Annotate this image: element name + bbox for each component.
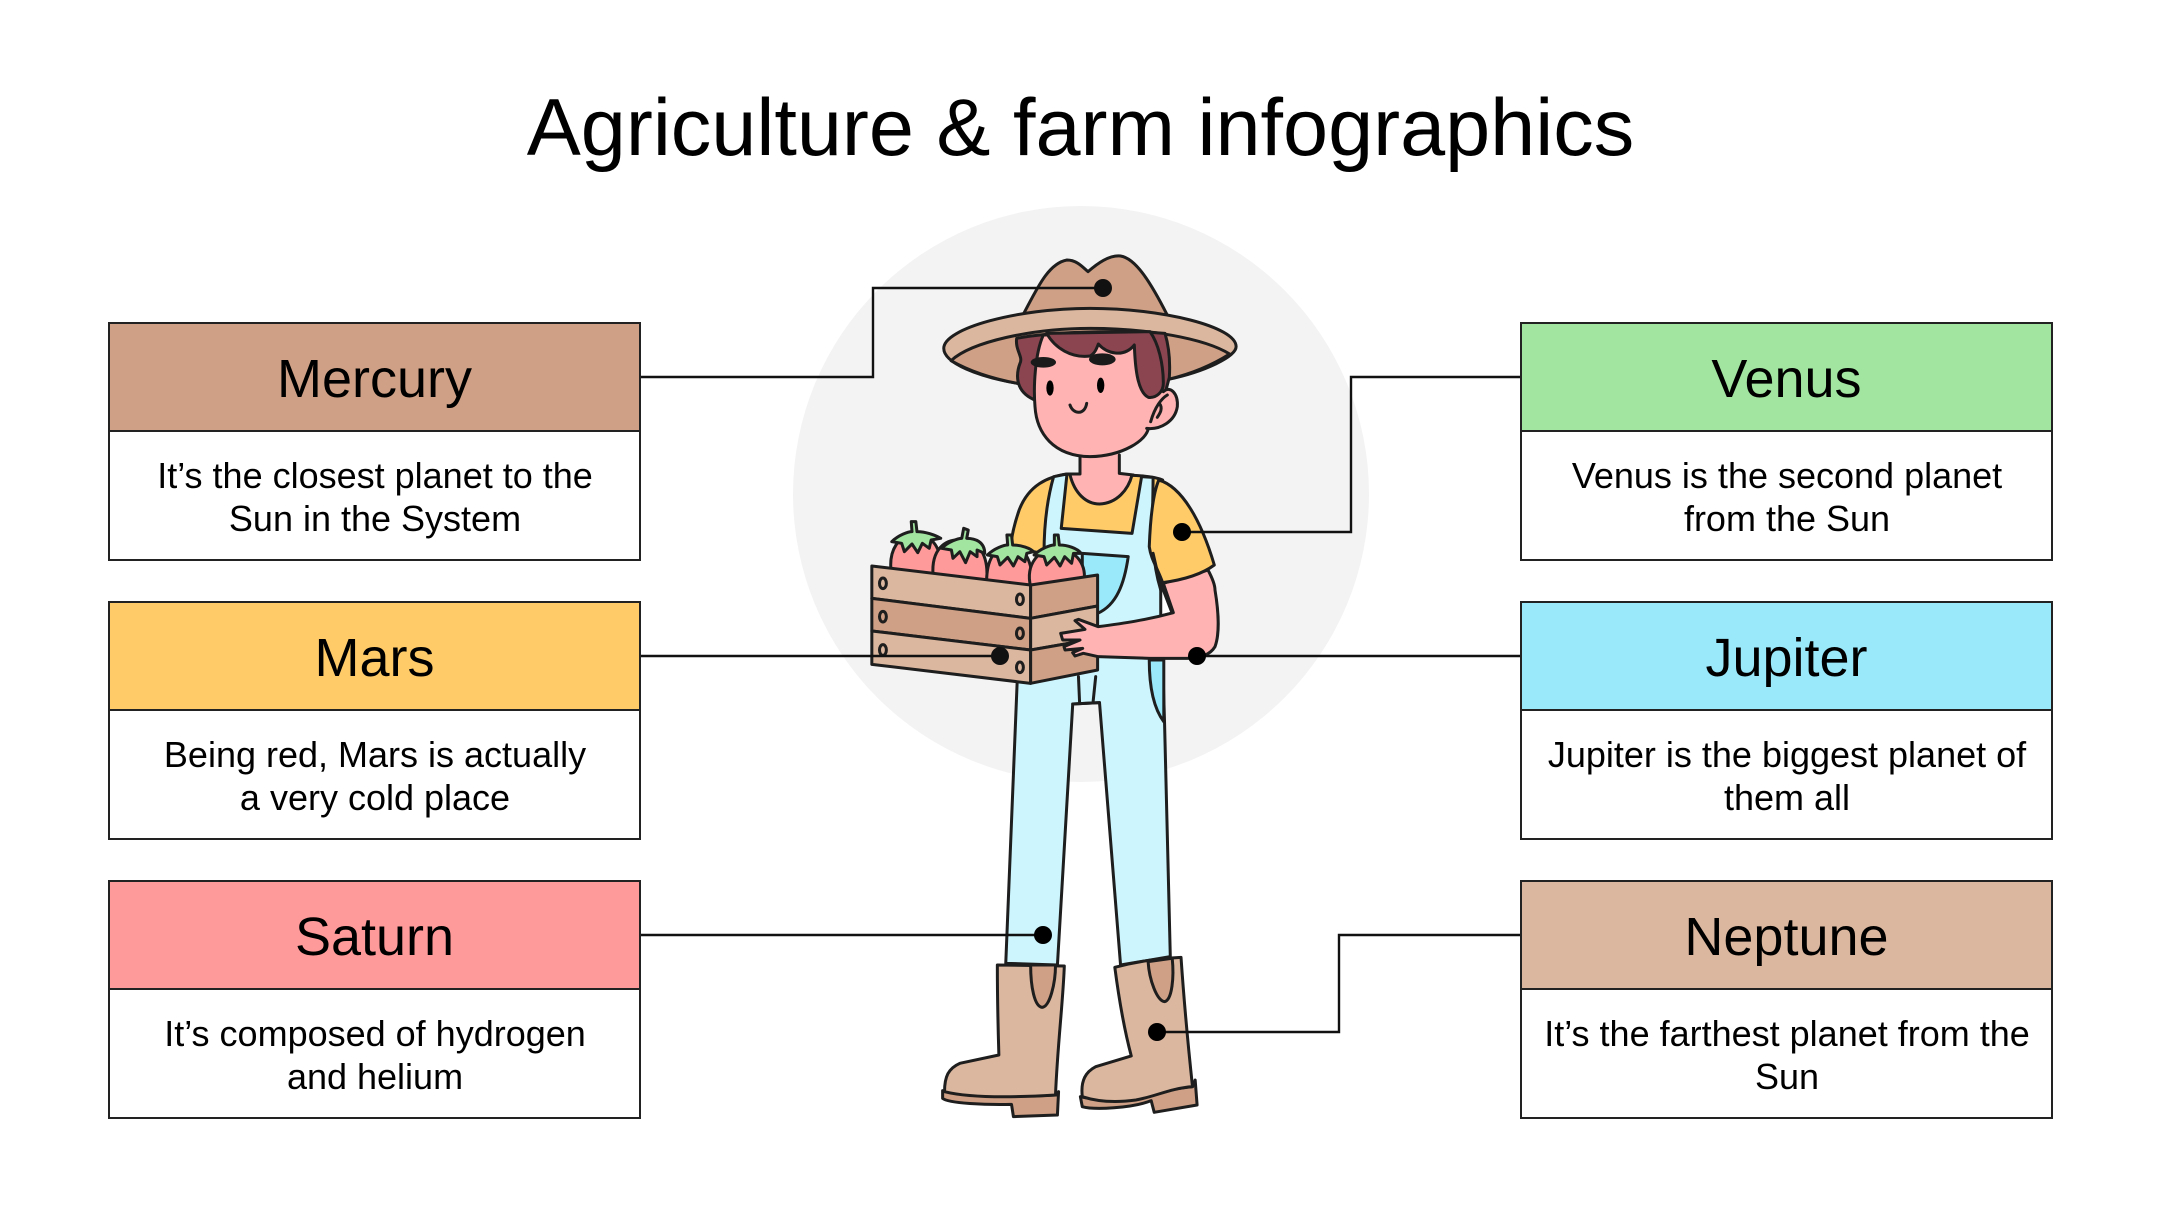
title: Agriculture & farm infographics — [527, 83, 1634, 173]
text: Saturn: It’s composed of hydrogen — [164, 1013, 586, 1054]
text: Jupiter — [1548, 734, 2026, 818]
right boot — [1080, 957, 1197, 1112]
heading: Mars — [110, 603, 639, 711]
connector: Neptune to boot — [1148, 935, 1521, 1041]
hair back — [1016, 332, 1170, 400]
connector: Venus to sleeve — [1173, 377, 1521, 541]
background circle — [793, 206, 1369, 782]
panel: Jupiter — [1520, 601, 2053, 840]
panel: Neptune — [1520, 880, 2053, 1119]
heading: Saturn — [110, 882, 639, 990]
heading: Jupiter: Jupiter — [1705, 628, 1868, 688]
text: Saturn — [164, 1013, 586, 1097]
text: Venus — [1572, 455, 2002, 539]
connector: Mercury to hat — [640, 279, 1112, 377]
heading: Jupiter — [1522, 603, 2051, 711]
fringe — [1047, 332, 1163, 397]
heading: Mars: Mars — [314, 628, 434, 688]
panel: Saturn — [108, 880, 641, 1119]
bib pocket — [1082, 553, 1128, 613]
heading: Saturn: Saturn — [295, 907, 454, 967]
eyebrows — [1031, 353, 1116, 368]
connector: Jupiter to arm — [1188, 647, 1521, 665]
panel: Venus — [1520, 322, 2053, 561]
sleeve — [1149, 480, 1214, 587]
hat crown — [1023, 256, 1167, 315]
connector: Saturn to leg — [640, 926, 1052, 944]
hat, body and crate artwork — [872, 256, 1236, 1117]
eyes — [1046, 378, 1104, 396]
text: Mars: Being red, Mars is actually — [164, 734, 586, 775]
text: Mercury — [157, 455, 593, 539]
heading: Mercury: Mercury — [277, 349, 472, 409]
panel: Mars — [108, 601, 641, 840]
text: Mars: a very cold place — [240, 777, 510, 818]
overalls — [1006, 474, 1172, 965]
left boot — [943, 965, 1064, 1117]
leg pocket — [1149, 660, 1164, 722]
text: Neptune — [1544, 1013, 2030, 1097]
ear — [1146, 389, 1177, 429]
crate — [872, 566, 1098, 683]
text: Venus: from the Sun — [1684, 498, 1890, 539]
neck — [1068, 450, 1133, 477]
face — [1034, 333, 1148, 457]
text: Neptune: Sun — [1755, 1056, 1819, 1097]
strawberries — [891, 522, 1084, 587]
arm and hand — [1061, 570, 1218, 658]
text: Mercury: It’s the closest planet to the — [157, 455, 593, 496]
text: Venus: Venus is the second planet — [1572, 455, 2002, 496]
strawberry leaves — [892, 522, 1081, 566]
head — [1016, 332, 1177, 477]
heading: Neptune — [1522, 882, 2051, 990]
text: Mars — [164, 734, 586, 818]
text: Saturn: and helium — [287, 1056, 463, 1097]
text: Neptune: It’s the farthest planet from the — [1544, 1013, 2030, 1054]
shirt — [1011, 473, 1163, 580]
connector: Mars to crate — [640, 647, 1009, 665]
heading: Venus — [1522, 324, 2051, 432]
panel: Mercury — [108, 322, 641, 561]
text: Mercury: Sun in the System — [229, 498, 521, 539]
heading: Neptune: Neptune — [1684, 907, 1889, 967]
mouth — [1070, 403, 1087, 412]
hat brim — [944, 308, 1236, 383]
illustration: farmer holding a crate of strawberries — [872, 256, 1236, 1117]
heading: Venus: Venus — [1711, 349, 1862, 409]
text: Jupiter: them all — [1724, 777, 1850, 818]
heading: Mercury — [110, 324, 639, 432]
text: Jupiter: Jupiter is the biggest planet of — [1548, 734, 2026, 775]
